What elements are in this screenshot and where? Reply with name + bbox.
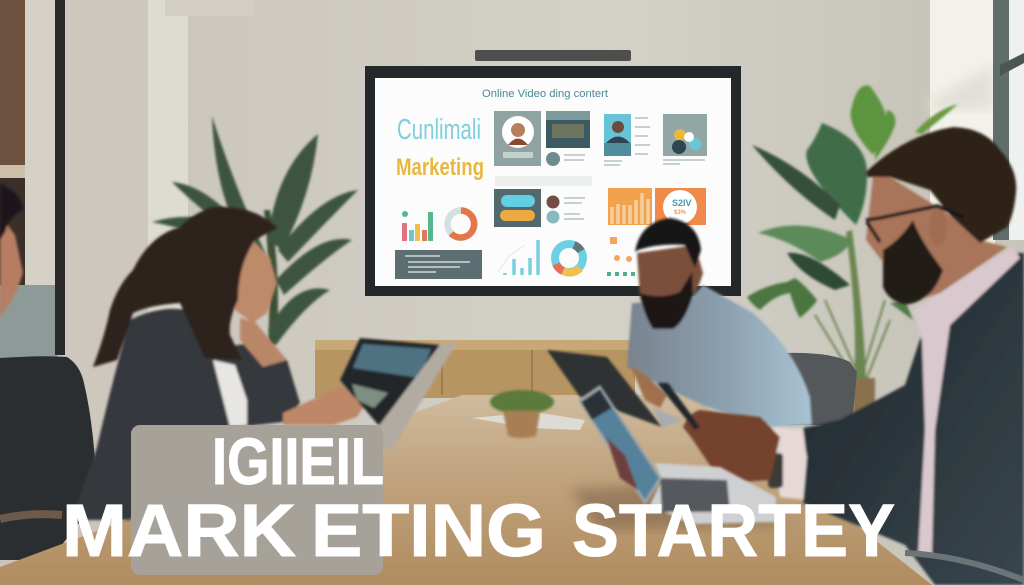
face [235, 240, 277, 323]
jacket [803, 253, 1024, 585]
hair [635, 218, 701, 268]
credenza [315, 340, 635, 398]
screen band [495, 176, 592, 186]
chair arm right [905, 553, 1024, 580]
button tile [494, 189, 541, 227]
left chair [0, 356, 97, 560]
hair [866, 127, 1016, 243]
screen word: Marketing: Marketing [396, 154, 484, 181]
donut chart [448, 210, 474, 238]
table shadow [570, 480, 790, 530]
right man [657, 127, 1024, 585]
woman [70, 207, 370, 520]
beard [640, 272, 693, 329]
centre laptop [547, 350, 683, 428]
face [637, 245, 703, 327]
hand [630, 365, 667, 408]
idea tile [663, 114, 707, 156]
watch [768, 453, 783, 488]
portrait avatar [546, 152, 560, 166]
line and bars chart [498, 240, 538, 275]
screen word: Cunlimali: Cunlimali [397, 114, 481, 146]
hair [93, 207, 277, 367]
orange percent tile: $3% [674, 210, 687, 216]
title line one: IGIIEIL [212, 424, 384, 498]
ear [929, 209, 947, 245]
orange percent tile [655, 188, 706, 225]
left plant [152, 116, 358, 345]
wall light bar [475, 50, 631, 61]
avatars [546, 196, 585, 224]
tablet [340, 338, 457, 450]
chair behind centre man [787, 353, 857, 425]
beard [883, 220, 943, 304]
profile card [494, 111, 541, 166]
photo tile [546, 111, 590, 148]
small caption rows [564, 118, 705, 165]
chair arm left [0, 514, 62, 519]
title [62, 424, 895, 572]
shirt collar [913, 247, 1020, 555]
potted plant [490, 390, 554, 438]
right plant [747, 85, 958, 416]
neck and face [866, 177, 1007, 304]
dark notes box [395, 250, 482, 279]
hand [683, 410, 780, 482]
portrait card [604, 114, 631, 156]
jacket [70, 309, 300, 520]
glasses [866, 206, 963, 242]
front laptop [578, 385, 776, 524]
papers [472, 412, 585, 430]
title word: ETING: ETING [311, 489, 546, 572]
far-left person [0, 184, 23, 318]
foreground grey laptop [131, 425, 383, 575]
title word: STARTEY: STARTEY [572, 489, 895, 572]
screen heading: Online Video ding contert [482, 88, 608, 100]
flow diagram [607, 237, 635, 276]
segment donut [555, 244, 583, 273]
title word: MARK: MARK [62, 489, 296, 572]
wall screen [365, 66, 741, 296]
neck and supporting hand [240, 318, 287, 367]
orange bar tile [608, 188, 652, 225]
cuffs [773, 427, 807, 500]
hand [283, 387, 370, 425]
centre man [627, 218, 812, 427]
shirt [627, 285, 812, 427]
table [0, 395, 932, 585]
bar chart [402, 211, 433, 241]
orange percent tile: S2IV [672, 198, 692, 208]
shirt [213, 360, 247, 427]
phone [657, 383, 700, 430]
